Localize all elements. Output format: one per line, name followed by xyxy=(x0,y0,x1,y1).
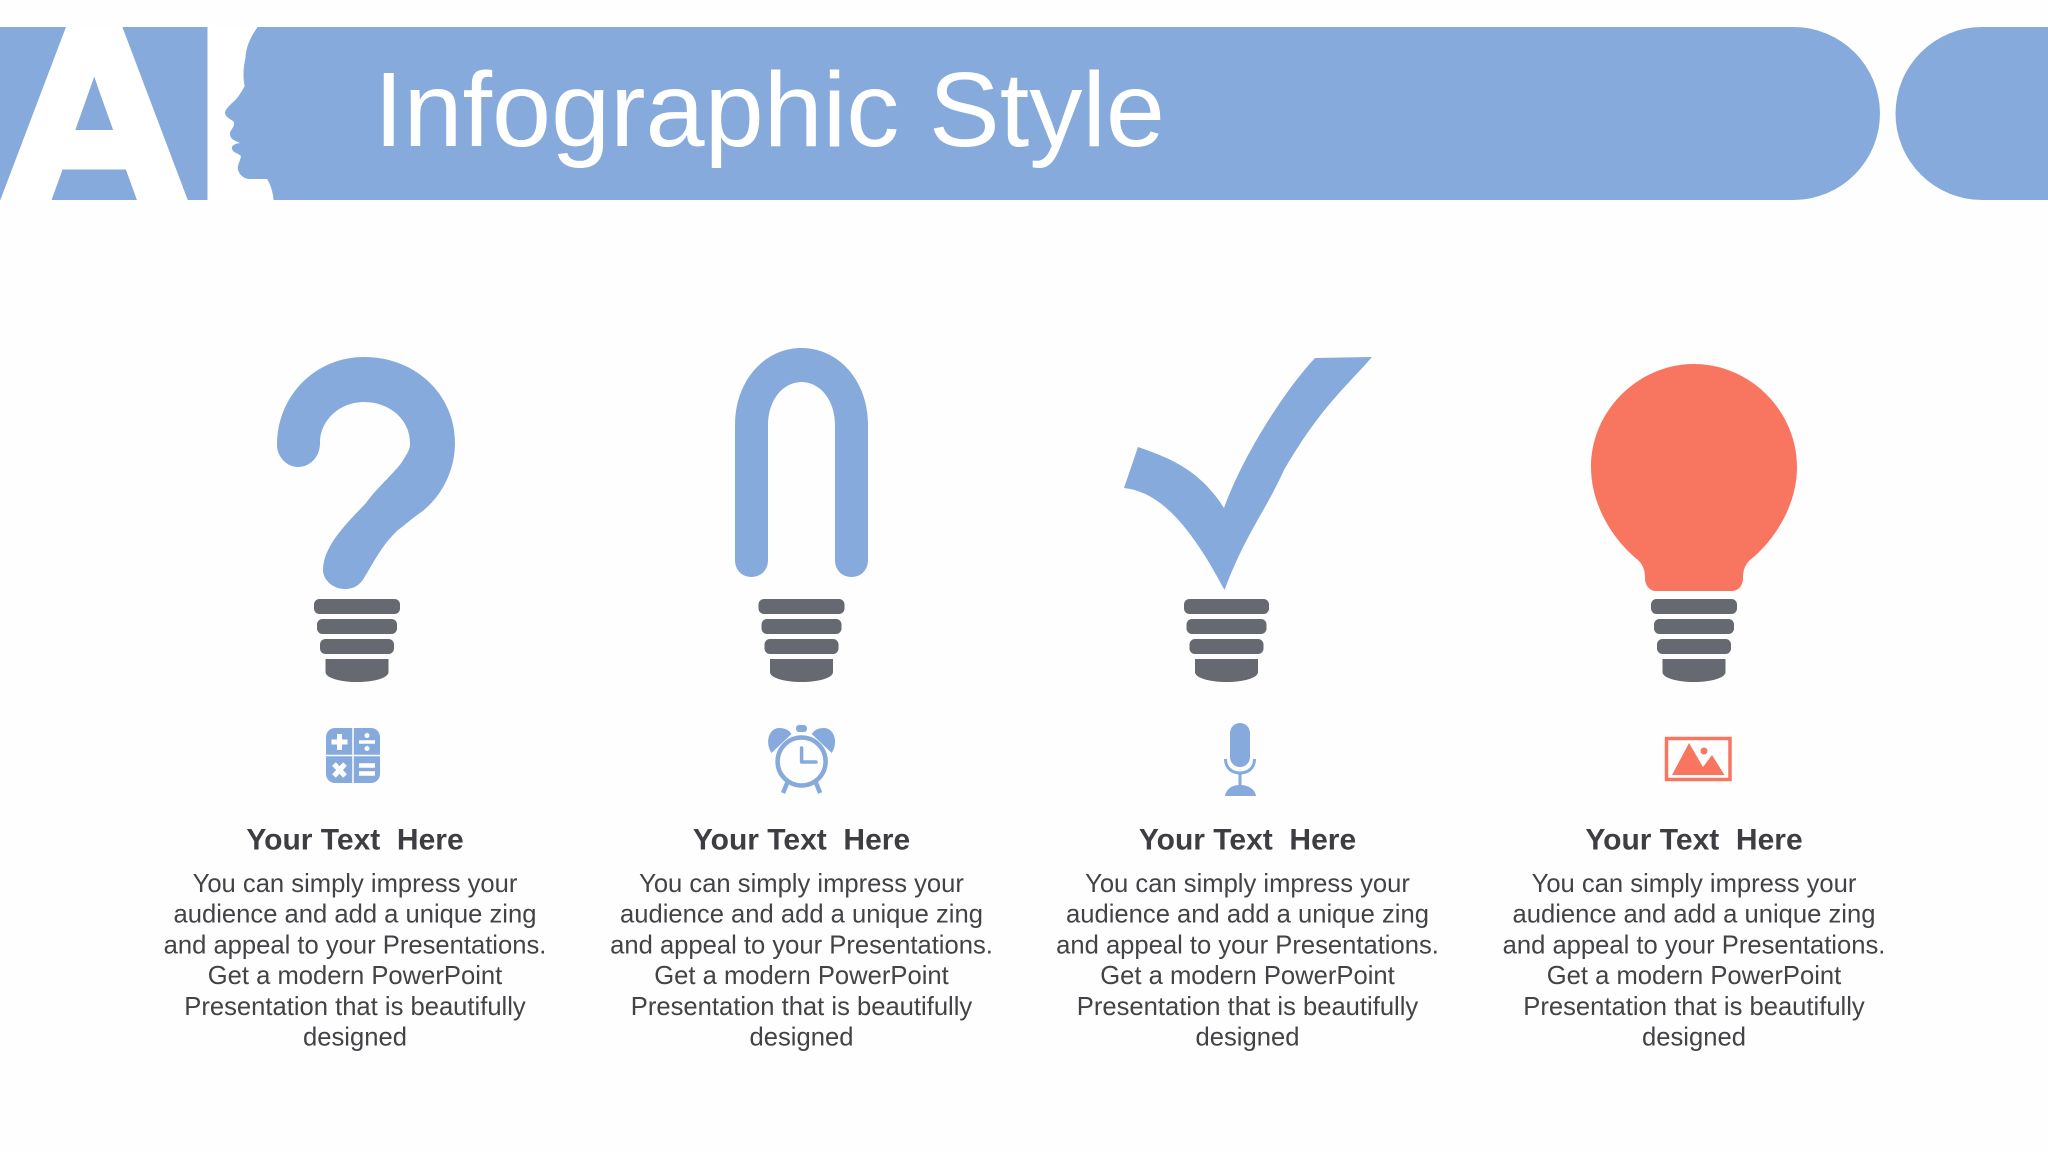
panel: question mark bulb xyxy=(164,357,546,1052)
header banner xyxy=(0,27,2048,200)
body text: Presentation that is beautifully xyxy=(184,993,526,1021)
body text: designed xyxy=(750,1024,853,1052)
body text: audience and add a unique zing xyxy=(1513,901,1875,929)
body text: and appeal to your Presentations. xyxy=(164,931,546,959)
body text: You can simply impress your xyxy=(193,870,518,898)
bulb socket xyxy=(314,599,400,682)
icon: calculator xyxy=(326,728,380,783)
heading: Your Text Here xyxy=(1139,824,1356,856)
body text: designed xyxy=(1642,1024,1746,1052)
panel: filament bulb xyxy=(610,348,993,1052)
body text: Get a modern PowerPoint xyxy=(1100,962,1395,990)
body text: Get a modern PowerPoint xyxy=(208,962,502,990)
body text: audience and add a unique zing xyxy=(620,901,983,929)
body text: and appeal to your Presentations. xyxy=(1503,931,1885,959)
body text: Presentation that is beautifully xyxy=(631,993,972,1021)
icon: alarm clock xyxy=(768,725,835,793)
head profile silhouette xyxy=(225,27,300,200)
body text: and appeal to your Presentations. xyxy=(1056,931,1439,959)
icon: picture frame xyxy=(1666,738,1730,780)
bulb shape: question mark xyxy=(277,357,455,589)
banner end pill xyxy=(1896,27,2048,200)
body text: audience and add a unique zing xyxy=(174,901,536,929)
bulb shape: U filament xyxy=(735,348,868,577)
body text: You can simply impress your xyxy=(1085,870,1410,898)
panel: lit coral bulb xyxy=(1503,364,1885,1052)
title: Infographic Style xyxy=(374,50,1165,169)
panel: check mark bulb xyxy=(1056,357,1439,1052)
white gap behind head profile xyxy=(208,27,275,200)
body text: You can simply impress your xyxy=(639,870,964,898)
bulb socket xyxy=(758,599,844,682)
heading: Your Text Here xyxy=(246,824,464,856)
body text: Get a modern PowerPoint xyxy=(1547,962,1841,990)
bulb shape: check mark xyxy=(1124,357,1372,590)
bulb socket xyxy=(1651,599,1737,682)
heading: Your Text Here xyxy=(693,824,910,856)
body text: audience and add a unique zing xyxy=(1066,901,1429,929)
heading: Your Text Here xyxy=(1585,824,1803,856)
bulb socket xyxy=(1184,599,1269,682)
icon: microphone xyxy=(1225,723,1256,796)
body text: Presentation that is beautifully xyxy=(1077,993,1418,1021)
body text: Presentation that is beautifully xyxy=(1523,993,1865,1021)
body text: and appeal to your Presentations. xyxy=(610,931,993,959)
body text: designed xyxy=(303,1024,407,1052)
body text: Get a modern PowerPoint xyxy=(654,962,949,990)
banner bar xyxy=(0,27,1880,200)
body text: You can simply impress your xyxy=(1532,870,1857,898)
body text: designed xyxy=(1196,1024,1299,1052)
bulb shape: filled lamp xyxy=(1591,364,1797,591)
